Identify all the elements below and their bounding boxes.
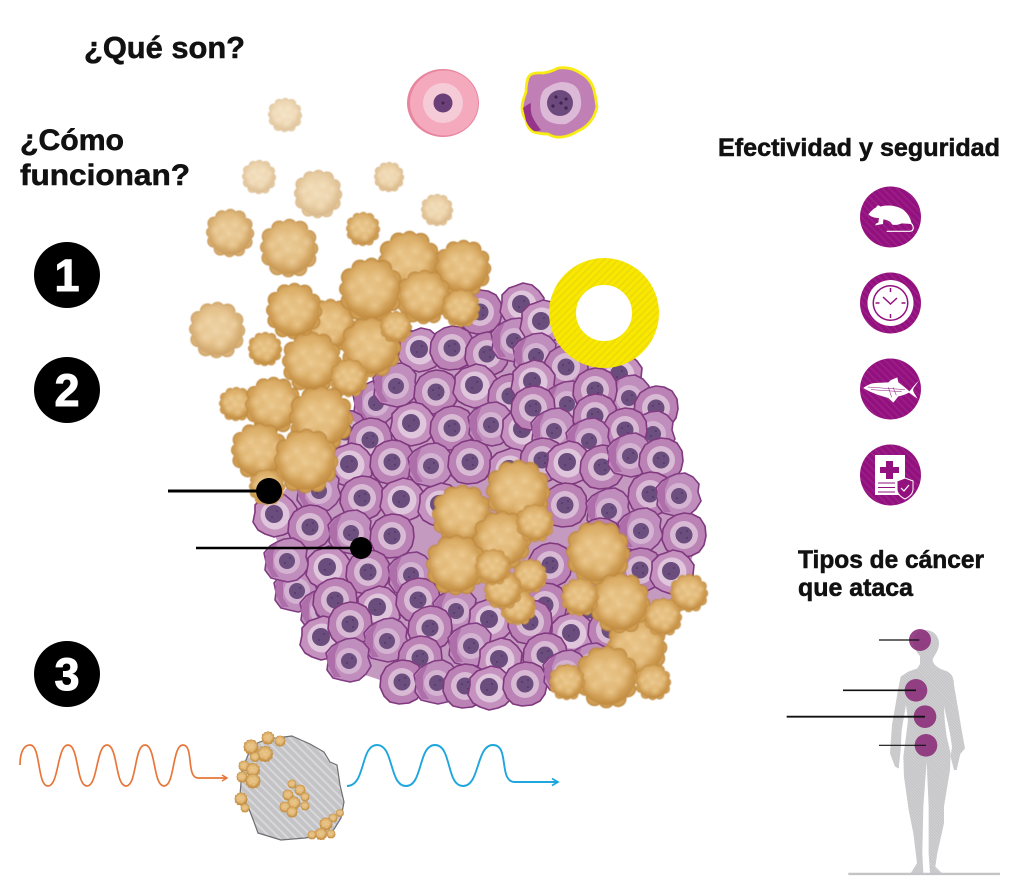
title: ¿Qué son?: ¿Qué son? xyxy=(84,30,245,65)
floor line xyxy=(848,870,1000,877)
tumor mass of cancer cells xyxy=(253,283,706,710)
clumps on small tumor xyxy=(234,731,344,840)
step number 2: 2 xyxy=(54,365,80,416)
heading: ¿Cómo funcionan? xyxy=(20,124,190,192)
upper-left nanoparticle clumps on tumor xyxy=(219,231,491,505)
orange incoming wave xyxy=(20,745,227,786)
human silhouette xyxy=(890,630,965,873)
step number 3 xyxy=(34,641,100,707)
heading: Tipos de cáncer que ataca: Tipos de cáncer xyxy=(798,546,984,574)
step number 2 xyxy=(34,357,100,423)
step number 1: 1 xyxy=(54,250,80,301)
small gray tumor with clumps xyxy=(234,731,344,840)
body silhouette with cancer locations xyxy=(787,629,1000,874)
cancer location circles xyxy=(905,629,937,757)
yellow highlight ring xyxy=(562,272,646,354)
heading: Tipos de cáncer que ataca: que ataca xyxy=(798,574,914,602)
lower-right nanoparticle clumps xyxy=(549,521,708,708)
pale detached nanoparticle clumps xyxy=(189,98,453,366)
step number 3: 3 xyxy=(54,649,80,700)
icon: fish xyxy=(860,358,921,420)
icon: mouse xyxy=(860,186,921,248)
heading: Tipos de cáncer que ataca xyxy=(798,546,984,602)
heading: ¿Cómo funcionan?: funcionan? xyxy=(20,159,190,192)
step number 1 xyxy=(34,242,100,308)
central nanoparticle clumps xyxy=(426,460,554,625)
blue outgoing wave xyxy=(347,745,558,786)
callout lines xyxy=(787,640,926,745)
icon: medical document with shield xyxy=(860,444,921,506)
callout line: tumor cell xyxy=(196,537,372,559)
healthy cell xyxy=(407,69,479,137)
callout line: nanoparticle xyxy=(168,478,282,504)
icon: clock xyxy=(860,272,921,334)
cancer cell xyxy=(522,68,597,137)
heading: Efectividad y seguridad: Efectividad y seguridad xyxy=(718,134,1000,162)
heading: ¿Cómo funcionan?: ¿Cómo xyxy=(20,124,124,157)
